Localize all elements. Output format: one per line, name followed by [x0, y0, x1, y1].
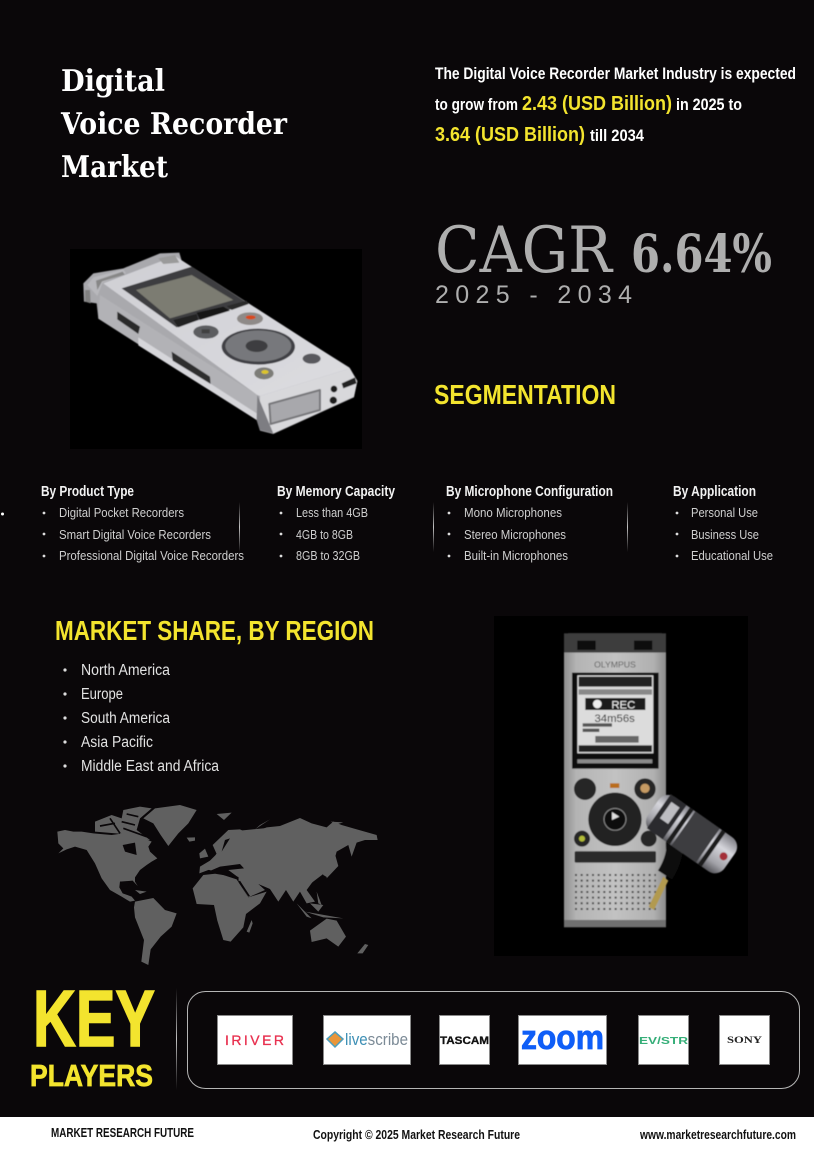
key players heading: KEY: [33, 974, 155, 1063]
segment: by microphone configuration: Built-in Microphones: [464, 548, 568, 563]
CAGR figure: 6.64%: [631, 224, 772, 285]
region list: Europe: [81, 686, 123, 703]
segment: by memory capacity: 4GB to 8GB: [296, 527, 353, 542]
CAGR figure: CAGR: [435, 214, 614, 288]
market growth text: [435, 65, 796, 146]
region list: South America: [81, 710, 170, 727]
iceland and svalbard: [187, 813, 232, 842]
heading: segmentation: SEGMENTATION: [434, 379, 616, 410]
segment: by memory capacity: By Memory Capacity: [277, 484, 395, 500]
market growth text: till 2034: [590, 127, 645, 145]
segment: by microphone configuration: [446, 484, 613, 563]
eurasia: [199, 818, 378, 903]
market growth text: 2.43 (USD Billion): [522, 92, 672, 115]
market growth text: to grow from: [435, 96, 518, 114]
heading: market share by region: MARKET SHARE, BY REGION: [55, 615, 374, 646]
image: recorder with microphone: REC: [611, 700, 635, 712]
stray bullet: [1, 512, 4, 516]
arctic channels: [100, 814, 147, 837]
greenland: [143, 805, 197, 846]
footer: Copyright © 2025 Market Research Future: [313, 1128, 520, 1142]
islands: [135, 819, 368, 953]
segment: by product type: By Product Type: [41, 484, 134, 500]
segment: by product type: Smart Digital Voice Recorders: [59, 527, 211, 542]
segment: by application: By Application: [673, 484, 756, 500]
africa: [193, 873, 267, 942]
region list: North America: [81, 662, 170, 679]
segment: by memory capacity: 8GB to 32GB: [296, 548, 360, 563]
CAGR figure: 2025 - 2034: [435, 281, 632, 309]
australia: [310, 919, 346, 947]
title: Market: [61, 150, 168, 185]
segment: by microphone configuration: Mono Microphones: [464, 505, 562, 520]
logo: iriver: [218, 1016, 292, 1064]
market growth text: 3.64 (USD Billion): [435, 123, 585, 146]
logo: tascam: TASCAM: [440, 1035, 489, 1047]
title: Digital: [61, 64, 165, 99]
eurasia core: [207, 827, 333, 887]
south america: [134, 898, 177, 965]
segment: by microphone configuration: By Microphone Configuration: [446, 484, 613, 500]
title: Voice Recorder: [60, 107, 288, 142]
logo: evistr: EV/STR: [639, 1035, 689, 1047]
region list: [63, 662, 219, 775]
segment: by memory capacity: Less than 4GB: [296, 505, 368, 520]
image: recorder with microphone: OLYMPUS: [594, 659, 636, 669]
logo: livescribe: [324, 1016, 410, 1064]
segment: by product type: [41, 484, 244, 563]
segment: by microphone configuration: Stereo Microphones: [464, 527, 566, 542]
arctic islands: [95, 807, 152, 840]
title: [60, 64, 288, 185]
key players heading: [30, 974, 155, 1093]
key players panel: [188, 992, 800, 1088]
logo: iriver: IRIVER: [225, 1032, 284, 1048]
segment: by application: Personal Use: [691, 505, 758, 520]
image: angled digital voice recorder: [70, 249, 362, 449]
logo: sony: SONY: [727, 1036, 762, 1046]
segment: by application: [673, 484, 773, 563]
footer: [0, 1117, 814, 1150]
segment: by product type: Professional Digital Voice Recorders: [59, 548, 244, 563]
market growth text: in 2025 to: [676, 96, 742, 114]
inland seas: [120, 838, 250, 897]
image: recorder with microphone: 34m56s: [594, 713, 635, 725]
world map: [57, 805, 378, 965]
logo: evistr: [638, 1016, 689, 1064]
north america: [57, 830, 157, 902]
logo: zoom: zoom: [521, 1019, 604, 1057]
region list: Middle East and Africa: [81, 758, 219, 775]
CAGR figure: [435, 214, 772, 309]
segment: by product type: Digital Pocket Recorders: [59, 505, 184, 520]
segment: by memory capacity: [277, 484, 395, 563]
logo: livescribe: livescribe: [345, 1030, 408, 1049]
segment: by application: Business Use: [691, 527, 759, 542]
segment: by application: Educational Use: [691, 548, 773, 563]
image: recorder with microphone: [494, 616, 748, 956]
footer: MARKET RESEARCH FUTURE: [51, 1126, 194, 1140]
region list: Asia Pacific: [81, 734, 153, 751]
logo: tascam: [440, 1016, 490, 1064]
key players heading: PLAYERS: [30, 1058, 153, 1093]
logo: sony: [720, 1016, 770, 1064]
